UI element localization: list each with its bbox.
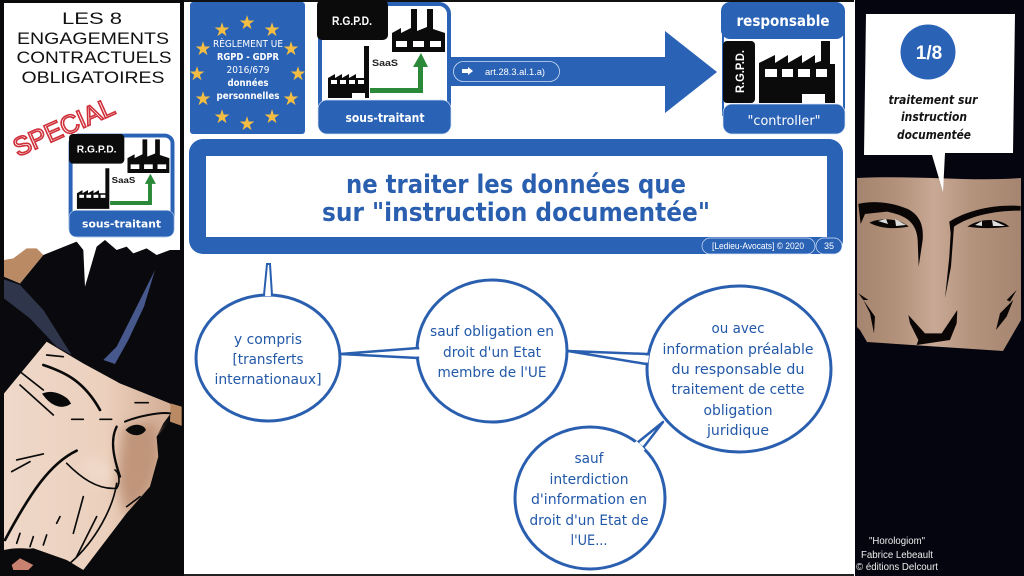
callout: information prealable: obligation (704, 403, 772, 419)
callout: information prealable: information préalable (662, 342, 814, 358)
icon: big factory (759, 41, 835, 103)
icon: EU stars: ★ (213, 20, 231, 41)
label: credit pill (702, 238, 815, 254)
text: regulation reference: 2016/679 (226, 65, 270, 76)
label: controller: "controller" (748, 113, 820, 129)
icon: sous-traitant mini card: R.G.P.D. (77, 145, 117, 156)
label: sous-traitant: sous-traitant (346, 110, 425, 125)
panel: right comic column (855, 0, 1024, 576)
text: regulation reference: RGPD - GDPR (217, 52, 279, 63)
panel: top frame bar (184, 0, 854, 2)
text: step description (888, 93, 978, 142)
callout: sauf interdiction: sauf (574, 451, 604, 467)
callout: sauf obligation: droit d'un Etat (443, 345, 541, 361)
text: regulation reference (213, 37, 283, 102)
illustration: masked face (855, 177, 1024, 576)
icon: step badge 1/8 (900, 24, 956, 80)
icon: EU stars: ★ (282, 89, 300, 110)
icon: EU stars: ★ (282, 39, 300, 60)
callout: sauf obligation (340, 280, 567, 422)
panel: EU regulation flag (188, 2, 307, 135)
callout: y compris: [transferts (232, 352, 304, 368)
icon: EU stars: ★ (263, 20, 281, 41)
text: image credit: © éditions Delcourt (856, 562, 938, 573)
label: article reference (454, 62, 560, 82)
callout: information prealable: traitement de cette (672, 382, 805, 398)
panel: left comic column (0, 0, 184, 576)
illustration: man with hat (4, 240, 184, 575)
label: page number: 35 (824, 241, 834, 251)
label: page number (816, 238, 842, 254)
text: step description: traitement sur (888, 93, 978, 107)
icon: small factory (328, 46, 369, 98)
label: vertical RGPD badge: R.G.P.D. (733, 50, 747, 93)
icon: EU stars: ★ (238, 13, 256, 34)
panel: bottom frame bar (184, 574, 854, 576)
icon: step badge 1/8: 1/8 (916, 43, 942, 64)
label: RGPD badge (317, 0, 388, 40)
callout: information prealable: du responsable du (672, 362, 804, 378)
title: les 8 engagements: LES 8 (62, 9, 122, 28)
icon: EU stars (188, 13, 307, 135)
label: SaaS: SaaS (372, 58, 398, 68)
panel: responsable card (721, 2, 845, 134)
icon: EU stars: ★ (194, 89, 212, 110)
callout: y compris: y compris (234, 332, 302, 348)
title: les 8 engagements (16, 9, 172, 87)
icon: EU stars: ★ (213, 107, 231, 128)
callout: sauf obligation: sauf obligation en (430, 324, 554, 340)
text: regulation reference: personnelles (216, 91, 280, 102)
label: article reference: art.28.3.al.1.a) (485, 67, 545, 77)
callout: speech bubble (864, 14, 1015, 192)
icon: EU stars: ★ (238, 114, 256, 135)
heading: statement (322, 170, 710, 228)
callout: sauf interdiction: d'information en (531, 492, 647, 508)
title: les 8 engagements: CONTRACTUELS (16, 48, 172, 67)
label: responsable: responsable (736, 12, 830, 30)
panel: sous-traitant card: R.G.P.D. (332, 14, 372, 28)
icon: EU stars: ★ (289, 64, 307, 85)
text: image credit: "Horologiom" (869, 536, 925, 547)
callout: y compris: internationaux] (214, 372, 322, 388)
title: les 8 engagements: ENGAGEMENTS (17, 29, 169, 48)
arrow: green upward (370, 53, 428, 93)
callout: information prealable: ou avec (712, 321, 765, 337)
text: regulation reference: données (228, 77, 269, 89)
icon: EU stars: ★ (263, 107, 281, 128)
text: step description: instruction (901, 110, 967, 124)
text: step description: documentée (897, 128, 971, 142)
panel: main statement frame (189, 139, 843, 254)
callout: sauf interdiction: l'UE... (570, 533, 608, 549)
heading: special stamp: SPECIAL (8, 91, 119, 162)
callout: sauf interdiction: interdiction (550, 472, 628, 488)
callout: sauf interdiction: droit d'un Etat de (530, 513, 649, 529)
text: image credit: Fabrice Lebeault (861, 550, 933, 561)
text: regulation reference: RÈGLEMENT UE (213, 37, 283, 50)
callout: y compris (196, 264, 340, 421)
text: image credit (856, 536, 938, 573)
icon: large factory (392, 9, 445, 52)
icon: EU stars: ★ (194, 39, 212, 60)
heading: statement: sur "instruction documentée" (322, 198, 710, 228)
icon: sous-traitant mini card (69, 134, 174, 237)
icon: sous-traitant mini card: sous-traitant (82, 218, 161, 231)
callout: sauf obligation: membre de l'UE (438, 365, 546, 381)
callout: information prealable (568, 286, 831, 452)
heading: statement: ne traiter les données que (346, 170, 686, 200)
panel: sous-traitant card (317, 0, 451, 134)
callout: information prealable: juridique (706, 423, 769, 439)
icon: EU stars: ★ (188, 64, 206, 85)
arrow: main blue arrow (451, 31, 717, 113)
title: les 8 engagements: OBLIGATOIRES (22, 68, 164, 87)
icon: sous-traitant mini card: SaaS (112, 175, 136, 185)
callout: sauf interdiction (515, 422, 665, 569)
label: credit pill: [Ledieu-Avocats] © 2020 (712, 241, 804, 251)
